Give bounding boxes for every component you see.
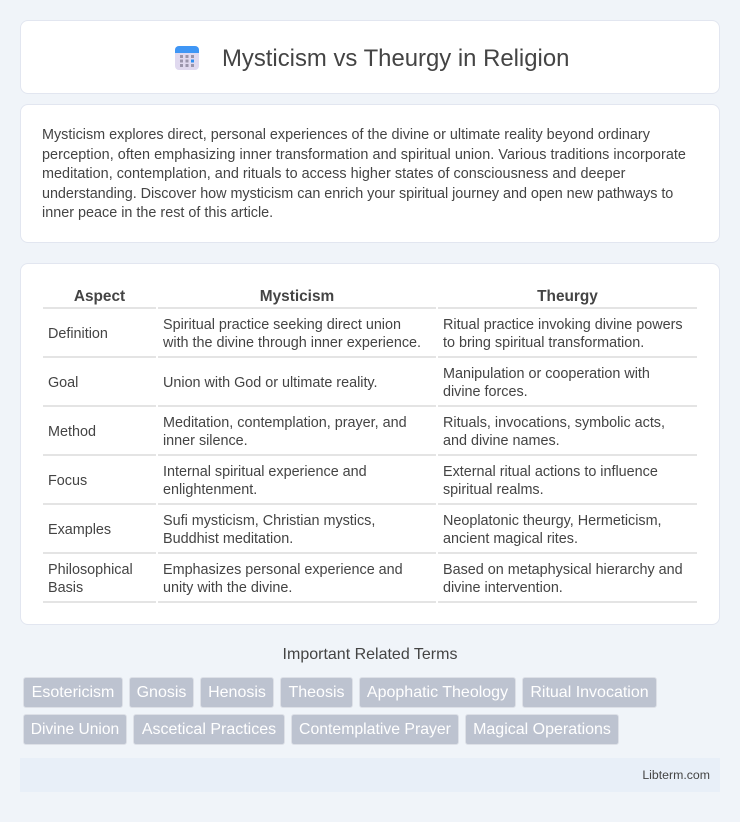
tag [359,677,516,708]
intro text [42,127,686,221]
tag: Ascetical Practices [142,721,276,738]
related terms heading: Important Related Terms [283,646,457,663]
tag: Theosis [288,684,345,701]
tag [280,677,353,708]
row: definition: with the divine through inner experience. [163,335,421,351]
footer [20,758,720,792]
row: philosophical basis: Based on metaphysical hierarchy and [443,562,683,578]
row: philosophical basis: Basis [48,580,83,596]
row: examples: Sufi mysticism, Christian mystics, [163,513,375,529]
tag: Ritual Invocation [530,684,649,701]
table header: Aspect [74,288,125,305]
row: philosophical basis: divine intervention. [443,580,563,596]
tag: Contemplative Prayer [299,721,451,738]
tag: Esotericism [32,684,114,701]
row: definition: Spiritual practice seeking direct union [163,317,401,333]
tag: Henosis [208,684,266,701]
row: method: Method [48,424,96,440]
intro text: understanding. Discover how mysticism can enrich your spiritual journey and open new pathways to [42,186,673,202]
row: focus: Focus [48,473,87,489]
row: philosophical basis [48,562,683,596]
intro text: meditation, contemplation, and rituals to access higher states of consciousness and deeper [42,166,625,182]
row: goal: Union with God or ultimate reality. [163,375,378,391]
row: focus: Internal spiritual experience and [163,464,367,480]
row: examples [48,513,662,547]
row: goal: divine forces. [443,384,528,400]
row: method: Meditation, contemplation, prayer, and [163,415,407,431]
related terms tags [23,677,657,745]
tag [129,677,194,708]
row: focus: External ritual actions to influence [443,464,658,480]
row: goal: Manipulation or cooperation with [443,366,650,382]
tag: Apophatic Theology [367,684,508,701]
table header: Theurgy [537,288,598,305]
row: goal [48,366,650,400]
tag [133,714,285,745]
row: philosophical basis: unity with the divine. [163,580,292,596]
row: method: inner silence. [163,433,248,449]
row: focus: spiritual realms. [443,482,544,498]
tag [291,714,459,745]
row: focus [48,464,658,498]
row: definition: to bring spiritual transformation. [443,335,644,351]
row: definition: Ritual practice invoking divine powers [443,317,683,333]
row: examples: Buddhist meditation. [163,531,293,547]
tag: Gnosis [137,684,186,701]
row: goal: Goal [48,375,78,391]
tag [23,714,127,745]
row: method: Rituals, invocations, symbolic acts, [443,415,665,431]
row: method [48,415,665,449]
tag: Magical Operations [473,721,611,738]
tag [23,677,123,708]
intro text: Mysticism explores direct, personal experiences of the divine or ultimate reality beyond ordinary [42,127,650,143]
tag [522,677,657,708]
tag: Divine Union [31,721,119,738]
title card [20,20,720,94]
row: examples: ancient magical rites. [443,531,578,547]
row: examples: Neoplatonic theurgy, Hermeticism, [443,513,662,529]
table header: Mysticism [260,288,334,305]
intro text: inner peace in the rest of this article. [42,205,273,221]
tag [465,714,619,745]
tag [200,677,274,708]
row: focus: enlightenment. [163,482,257,498]
row: examples: Examples [48,522,111,538]
footer credit: Libterm.com [642,768,710,782]
comparison table [43,288,697,603]
row: method: and divine names. [443,433,560,449]
row: definition [48,317,683,351]
table header [74,288,598,305]
row: definition: Definition [48,326,108,342]
intro text: perception, often emphasizing inner transformation and spiritual union. Various traditions incorporate [42,146,686,162]
icon: calendar [175,46,199,70]
title: Mysticism vs Theurgy in Religion [222,45,569,72]
row: philosophical basis: Philosophical [48,562,133,578]
row: philosophical basis: Emphasizes personal experience and [163,562,403,578]
panel: comparison table [20,263,720,625]
panel: introduction [20,104,720,243]
